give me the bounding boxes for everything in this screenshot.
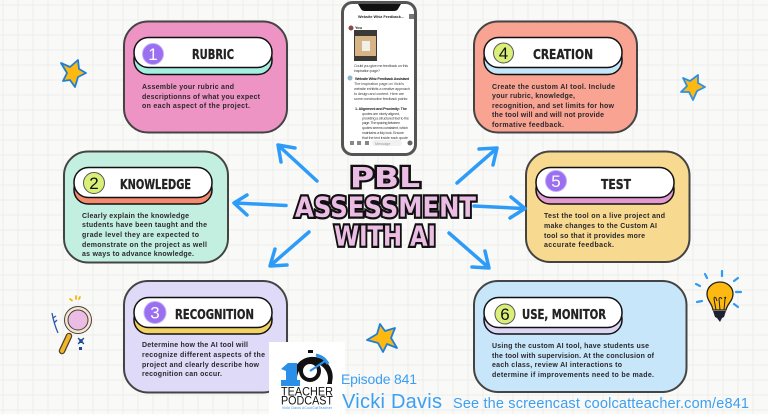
text: use, monitor description: Using the custom AI tool, have students use: [492, 343, 649, 350]
heading pill: knowledge: [74, 168, 212, 204]
text: rubric description: on each aspect of the project.: [142, 103, 250, 110]
text: screencast link: See the screencast coolcatteacher.com/e841: [453, 396, 749, 412]
text: knowledge description: demonstrate on the project as well: [82, 242, 207, 249]
logo: 10 minute teacher podcast: TEACHER: [281, 386, 333, 398]
text: test description: tool so that it provides more: [544, 233, 645, 240]
heading pill: test: TEST: [601, 177, 632, 193]
phone screenshot: Website Whiz Feedback Assistant: [355, 77, 410, 81]
phone screenshot: Website Whiz Feedback...: [358, 15, 404, 19]
text: host name: Vicki Davis: [342, 391, 442, 413]
text: test description: [544, 213, 665, 249]
text: use, monitor description: the tool with supervision. At the conclusion of: [492, 353, 655, 360]
heading pill: creation: CREATION: [533, 47, 593, 63]
title: WITH AI: [334, 220, 436, 252]
text: use, monitor description: determine if improvements need to be made.: [492, 372, 654, 379]
text: knowledge description: [82, 213, 207, 258]
phone screenshot: page. The spacing between: [362, 121, 400, 125]
text: test description: Test the tool on a live project and: [544, 213, 665, 220]
text: creation description: your rubric, knowledge,: [492, 93, 575, 100]
text: test description: make changes to the Custom AI: [544, 223, 657, 230]
text: test description: accurate feedback.: [544, 242, 614, 249]
arrow: to rubric: [278, 145, 317, 181]
heading pill: creation: [484, 38, 622, 74]
phone screenshot: quotes seems consistent, which: [362, 126, 408, 130]
text: recognition description: [142, 342, 265, 378]
phone screenshot: The inspiration page on Vicki's: [354, 82, 404, 86]
logo: 10 minute teacher podcast: PODCAST: [281, 396, 333, 408]
phone screenshot: Message: [375, 142, 390, 146]
text: creation description: formative feedback.: [492, 122, 564, 129]
heading pill: knowledge: 2: [89, 174, 99, 193]
text: knowledge description: as ways to advance knowledge.: [82, 251, 194, 258]
panel: 5 test: [526, 152, 690, 262]
phone screenshot: to design and content. Here are: [354, 92, 404, 96]
title: PBL: [350, 161, 420, 194]
phone screenshot: some constructive feedback points:: [354, 97, 408, 101]
arrow: to use, monitor: [449, 233, 489, 268]
title: ASSESSMENT: [295, 190, 476, 224]
phone screenshot: Could you give me feedback on this: [354, 64, 408, 68]
phone screenshot: You: [355, 26, 363, 30]
arrow: to recognition: [270, 232, 309, 266]
heading pill: use, monitor: [484, 298, 622, 334]
heading pill: recognition: RECOGNITION: [175, 307, 254, 323]
heading pill: knowledge: KNOWLEDGE: [120, 177, 191, 193]
heading pill: use, monitor: USE, MONITOR: [522, 307, 606, 323]
phone screenshot: quotes are nicely aligned,: [362, 112, 400, 116]
arrow: to creation: [457, 148, 497, 183]
text: rubric description: [142, 84, 261, 110]
title: [295, 161, 476, 252]
panel: 6 use, monitor: [474, 281, 686, 392]
icon: star top left: [61, 60, 86, 87]
text: recognition description: recognition can occur.: [142, 371, 222, 378]
panel: 2 knowledge: [64, 152, 228, 262]
text: creation description: the tool will and will not provide: [492, 112, 604, 119]
heading pill: test: 5: [551, 172, 561, 191]
heading pill: rubric: 1: [148, 45, 158, 64]
text: creation description: Create the custom AI tool. Include: [492, 84, 615, 91]
text: knowledge description: Clearly explain the knowledge: [82, 213, 189, 220]
text: use, monitor description: [492, 343, 655, 379]
phone screenshot: website exhibits a creative approach: [354, 87, 410, 91]
icon: star top right: [681, 75, 705, 100]
icon: light bulb: [696, 271, 741, 322]
phone screenshot: maintains a tidy look. Ensure: [362, 131, 404, 135]
icon: star bottom centre: [367, 324, 397, 352]
heading pill: test: [536, 168, 674, 204]
panel: 3 recognition: [124, 281, 287, 392]
arrow: to knowledge: [234, 195, 286, 215]
phone screenshot: 1. Alignment and Proximity: The: [355, 107, 407, 111]
heading pill: use, monitor: 6: [500, 305, 510, 324]
text: episode number: Episode 841: [341, 371, 417, 387]
text: use, monitor description: each class, review AI interactions to: [492, 362, 622, 369]
text: recognition description: project and clearly describe how: [142, 362, 260, 369]
phone screenshot: that the text inside each quote: [362, 136, 408, 140]
panel: 1 rubric: [124, 22, 287, 132]
phone screenshot: providing a structured feel to the: [362, 116, 409, 120]
heading pill: rubric: RUBRIC: [192, 47, 234, 63]
text: knowledge description: students have been taught and the: [82, 222, 207, 229]
text: recognition description: Determine how the AI tool will: [142, 342, 248, 349]
text: creation description: [492, 84, 615, 129]
icon: magnifying glass: [52, 296, 92, 351]
heading pill: creation: 4: [499, 44, 508, 63]
text: recognition description: recognize different aspects of the: [142, 352, 265, 359]
heading pill: recognition: 3: [150, 304, 160, 322]
heading pill: recognition: [134, 298, 272, 334]
panel: 4 creation: [474, 22, 637, 132]
phone screenshot: inspiration page?: [354, 69, 380, 73]
text: rubric description: Assemble your rubric and: [142, 84, 234, 91]
phone screenshot: [342, 2, 416, 154]
text: rubric description: descriptionns of what you expect: [142, 94, 261, 101]
text: creation description: recognition, and set limits for how: [492, 103, 615, 110]
logo: 10 minute teacher podcast: Vicki Davis #CoolCatTeacher: [282, 406, 333, 410]
heading pill: rubric: [134, 38, 272, 74]
arrow: to test: [474, 197, 525, 218]
logo: 10 minute teacher podcast: [269, 342, 345, 414]
text: knowledge description: grade level they are expected to: [82, 232, 199, 239]
